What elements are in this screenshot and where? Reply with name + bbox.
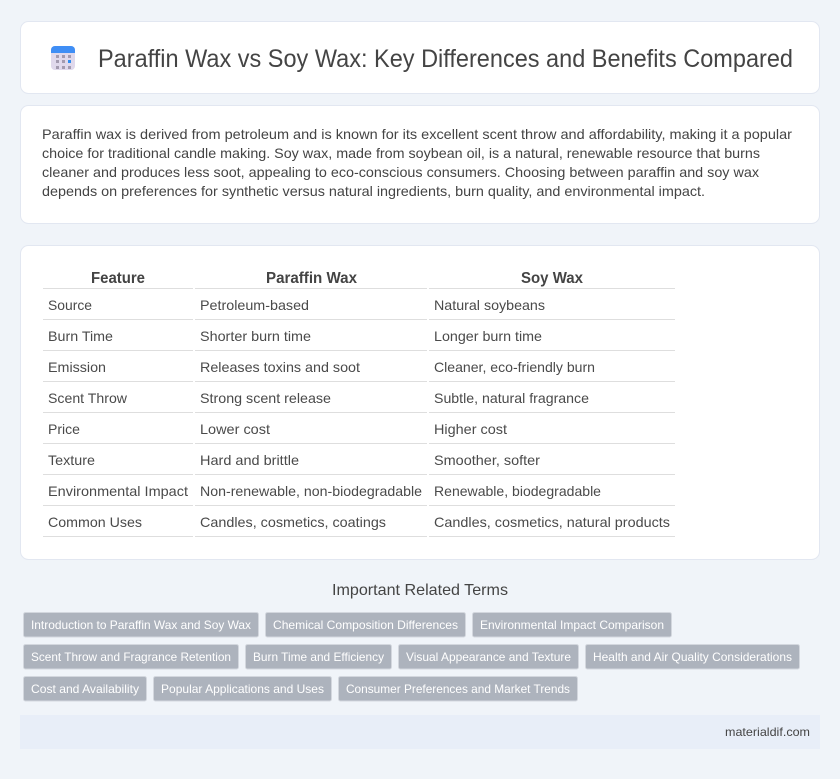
table header: Soy Wax (521, 270, 583, 287)
related term tags: Health and Air Quality Considerations (593, 650, 792, 664)
row: scent throw: Strong scent release (200, 390, 331, 406)
panel: introduction text: choice for traditional candle making. Soy wax, made from soybean oil, is a natural, renewable resource that burns (42, 145, 760, 161)
row: source (48, 297, 545, 313)
row: source: Natural soybeans (434, 297, 545, 313)
row: environmental impact (48, 483, 601, 499)
row: price: Price (48, 421, 80, 437)
title: Paraffin Wax vs Soy Wax: Key Differences and Benefits Compared (98, 45, 793, 73)
related term tags: Environmental Impact Comparison (480, 618, 664, 632)
row: price: Higher cost (434, 421, 507, 437)
panel: introduction text: depends on preferences for synthetic versus natural ingredients, burn quality, and environmental impact. (42, 183, 705, 199)
row: texture: Smoother, softer (434, 452, 540, 468)
footer: materialdif.com (725, 725, 810, 739)
related term tags: Scent Throw and Fragrance Retention (31, 650, 231, 664)
row: source: Petroleum-based (200, 297, 309, 313)
panel: introduction text: Paraffin wax is derived from petroleum and is known for its excellent scent throw and affordability, making it a popular (42, 126, 792, 142)
row: scent throw: Subtle, natural fragrance (434, 390, 589, 406)
related term tags: Burn Time and Efficiency (253, 650, 384, 664)
row: emission: Releases toxins and soot (200, 359, 360, 375)
footer (20, 715, 820, 749)
row: burn time: Burn Time (48, 328, 113, 344)
row: scent throw (48, 390, 589, 406)
row: common uses: Candles, cosmetics, natural products (434, 514, 670, 530)
row: common uses (48, 514, 670, 530)
icon: calendar (51, 46, 75, 70)
row: price: Lower cost (200, 421, 270, 437)
table header: Paraffin Wax (266, 270, 357, 287)
row: common uses: Common Uses (48, 514, 142, 530)
row: texture: Hard and brittle (200, 452, 299, 468)
related term tags: Chemical Composition Differences (273, 618, 458, 632)
row: price (48, 421, 507, 437)
panel: comparison table (20, 246, 820, 560)
related term tags: Cost and Availability (31, 682, 139, 696)
panel: introduction text: cleaner and produces less soot, appealing to eco-conscious consumers. Choosing between paraffin and soy wax (42, 164, 759, 180)
row: common uses: Candles, cosmetics, coatings (200, 514, 386, 530)
heading: related terms: Important Related Terms (332, 582, 508, 599)
panel: title card (20, 22, 820, 94)
row: emission (48, 359, 595, 375)
table header: Feature (91, 270, 145, 287)
panel: introduction text (20, 106, 820, 224)
row: texture (48, 452, 540, 468)
row: emission: Cleaner, eco-friendly burn (434, 359, 595, 375)
row: texture: Texture (48, 452, 95, 468)
related term tags: Introduction to Paraffin Wax and Soy Wax (31, 618, 251, 632)
related term tags (24, 612, 800, 701)
row: source: Source (48, 297, 92, 313)
row: environmental impact: Environmental Impact (48, 483, 188, 499)
related term tags: Consumer Preferences and Market Trends (346, 682, 570, 696)
row: burn time (48, 328, 542, 344)
related term tags: Visual Appearance and Texture (406, 650, 571, 664)
row: scent throw: Scent Throw (48, 390, 128, 406)
row: emission: Emission (48, 359, 106, 375)
row: environmental impact: Renewable, biodegradable (434, 483, 601, 499)
related term tags: Popular Applications and Uses (161, 682, 324, 696)
row: burn time: Longer burn time (434, 328, 542, 344)
row: burn time: Shorter burn time (200, 328, 311, 344)
table header (91, 270, 583, 287)
row: environmental impact: Non-renewable, non-biodegradable (200, 483, 422, 499)
